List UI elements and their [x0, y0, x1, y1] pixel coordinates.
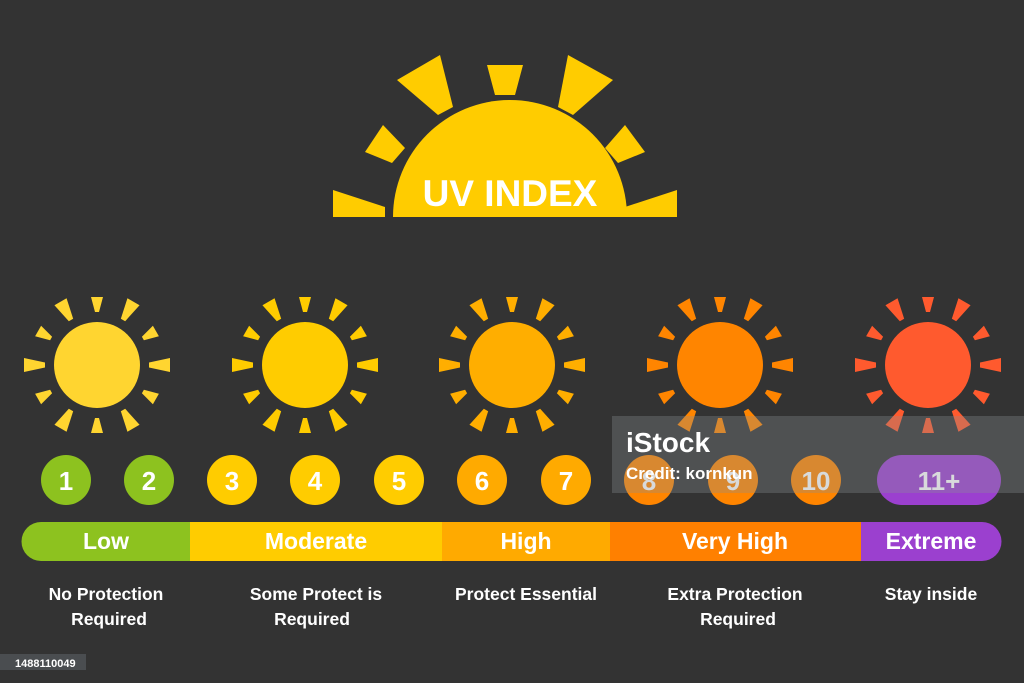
watermark band — [612, 416, 1024, 493]
scale bar: Extreme — [886, 528, 976, 554]
number circles: 11+ — [918, 466, 960, 496]
icon: sun moderate — [232, 297, 378, 433]
captions: Protect Essential — [455, 584, 597, 604]
number circles: 9 — [726, 466, 740, 496]
icon: sun extreme — [855, 297, 1001, 433]
number circles: 1 — [59, 466, 73, 496]
number circles: 6 — [475, 466, 489, 496]
number circles: 3 — [225, 466, 239, 496]
number circles: 7 — [559, 466, 573, 496]
captions: Required — [71, 609, 147, 629]
number circles: 4 — [308, 466, 323, 496]
scale bar: Moderate — [265, 528, 367, 554]
captions: No Protection — [49, 584, 163, 604]
title: UV index sun — [333, 55, 677, 217]
captions: Required — [700, 609, 776, 629]
icon: sun very high — [647, 297, 793, 433]
captions: Some Protect is — [250, 584, 382, 604]
id label: 1488110049 — [15, 658, 76, 670]
scale bar: High — [500, 528, 552, 554]
watermark band: iStock — [626, 427, 710, 458]
number circles: 2 — [142, 466, 156, 496]
number circles: 8 — [642, 466, 656, 496]
captions: Extra Protection — [667, 584, 803, 604]
captions: Required — [274, 609, 350, 629]
captions: Stay inside — [885, 584, 977, 604]
number circles: 10 — [802, 466, 830, 496]
icon: sun high — [439, 297, 585, 433]
watermark band: Credit: kornkun — [626, 464, 753, 483]
captions — [49, 584, 977, 629]
scale bar — [22, 522, 1002, 561]
id label — [0, 654, 86, 670]
number circles — [41, 455, 1001, 505]
scale bar: Low — [83, 528, 129, 554]
icon: sun low — [24, 297, 170, 433]
title: UV index sun: UV INDEX — [423, 173, 598, 214]
scale bar: Very High — [682, 528, 788, 554]
number circles: 5 — [392, 466, 406, 496]
